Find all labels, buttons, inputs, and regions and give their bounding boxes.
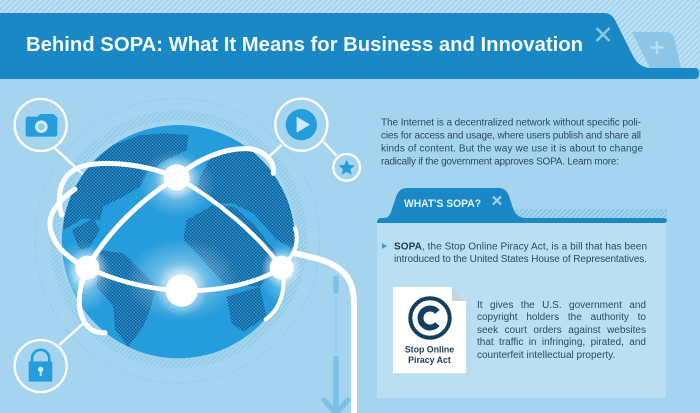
globe — [62, 125, 295, 358]
copyright symbol — [410, 298, 450, 338]
plus tab — [632, 32, 681, 68]
bullet text — [394, 242, 647, 265]
tab shape — [377, 188, 667, 223]
intro paragraph: kinds of content. But the way we use it is about to change — [381, 144, 643, 154]
description text: It gives the U.S. government and — [477, 300, 646, 310]
globe highlights — [141, 152, 212, 214]
intro paragraph: The Internet is a decentralized network without specific poli- — [381, 118, 641, 128]
intro paragraph: radically if the government approves SOPA. Learn more: — [381, 156, 619, 168]
dotted outer ring — [35, 98, 320, 383]
icon: lock — [15, 340, 67, 392]
description text: seek court orders against websites — [477, 324, 646, 336]
dashed arrow — [324, 278, 348, 413]
network orbits — [50, 149, 297, 333]
icon: play button — [275, 99, 327, 151]
close icon — [596, 28, 610, 41]
intro paragraph: cies for access and usage, where users publish and share all — [381, 130, 641, 142]
hatched ring — [54, 115, 302, 363]
header hatch strip — [0, 0, 700, 68]
description text: that traffic in infringing, pirated, and — [477, 337, 646, 348]
panel body — [377, 223, 666, 398]
continents — [63, 133, 295, 347]
banner shape — [0, 13, 699, 79]
bullet marker — [382, 243, 387, 249]
intro paragraph — [381, 118, 643, 168]
network nodes — [75, 164, 294, 307]
document icon — [393, 287, 466, 373]
node glows — [67, 155, 302, 317]
description text: counterfeit intellectual property. — [477, 350, 615, 360]
description text — [477, 300, 646, 360]
tab close icon — [493, 196, 501, 204]
document caption: Stop Online — [405, 344, 454, 354]
bullet text: SOPA, the Stop Online Piracy Act, is a bill that has been — [394, 242, 647, 252]
header banner — [0, 13, 699, 79]
bullet text: introduced to the United States House of Representatives. — [394, 254, 647, 265]
globe illustration — [15, 98, 360, 413]
title: Behind SOPA: What It Means for Business and Innovation — [26, 33, 583, 56]
panel heading: WHAT'S SOPA? — [404, 198, 481, 210]
tab hatch — [512, 209, 667, 218]
route line to next section — [295, 253, 354, 413]
document icon: Piracy Act — [408, 355, 451, 365]
connectors — [55, 142, 337, 345]
icon: star — [333, 154, 360, 181]
icon: camera — [15, 99, 67, 151]
panel: what's SOPA — [377, 188, 667, 398]
description text: copyright holders the authority to — [477, 312, 646, 323]
